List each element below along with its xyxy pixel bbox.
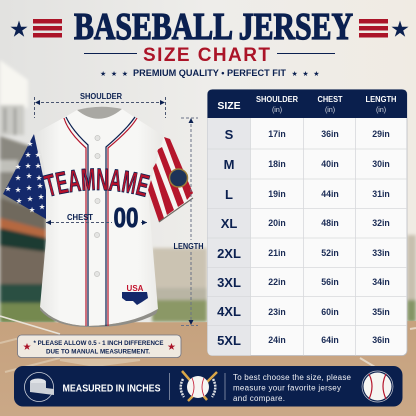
measurement values: 20in bbox=[268, 218, 286, 228]
divider bbox=[170, 373, 225, 400]
chest measurement: CHEST bbox=[67, 213, 93, 222]
icon: right stars and stripes bbox=[359, 19, 408, 38]
note callout: DUE TO MANUAL MEASUREMENT. bbox=[46, 348, 150, 356]
table header: (in) bbox=[272, 107, 282, 114]
size labels: 4XL bbox=[217, 304, 241, 319]
measurement values: 24in bbox=[268, 335, 286, 345]
bottom banner bbox=[14, 366, 402, 406]
left sleeve: stars: ★ bbox=[25, 151, 32, 159]
measurement values: 19in bbox=[268, 189, 286, 199]
left sleeve: stars: ★ bbox=[5, 185, 12, 193]
measurement values: 52in bbox=[321, 248, 339, 258]
left sleeve: stars: ★ bbox=[38, 193, 45, 201]
table header: (in) bbox=[325, 107, 335, 114]
size labels: 2XL bbox=[217, 246, 241, 261]
jersey bbox=[3, 106, 194, 328]
left sleeve: stars: ★ bbox=[35, 151, 42, 159]
size labels: 5XL bbox=[217, 333, 241, 348]
left sleeve: stars: ★ bbox=[15, 163, 22, 171]
measurement values: 18in bbox=[268, 159, 286, 169]
table header: SIZE bbox=[217, 100, 241, 112]
measurement values: 17in bbox=[268, 129, 286, 139]
measurement values: 36in bbox=[321, 129, 339, 139]
USA logo: USA bbox=[127, 284, 144, 293]
measurement values: 22in bbox=[268, 277, 286, 287]
size labels: XL bbox=[221, 216, 237, 231]
team name: TEAMNAME bbox=[42, 168, 150, 198]
measurement values: 34in bbox=[372, 277, 390, 287]
size labels: M bbox=[224, 157, 234, 172]
icon: crossed bats and ball bbox=[181, 371, 217, 401]
size labels bbox=[217, 127, 241, 348]
USA logo bbox=[122, 284, 148, 305]
collar inner bbox=[77, 107, 122, 132]
measured in inches label: MEASURED IN INCHES bbox=[62, 384, 161, 394]
tip text: measure your favorite jersey bbox=[233, 384, 341, 392]
placket piping bbox=[64, 117, 137, 326]
right sleeve: stripes bbox=[148, 136, 193, 222]
table header bbox=[208, 90, 407, 118]
left sleeve: stars: ★ bbox=[27, 195, 34, 203]
left sleeve: stars: ★ bbox=[27, 140, 34, 148]
size labels: S bbox=[225, 127, 234, 142]
subtitle: SIZE CHART bbox=[143, 45, 270, 66]
measurement values: 32in bbox=[372, 218, 390, 228]
left sleeve: stars: ★ bbox=[16, 197, 23, 205]
table header: SHOULDER bbox=[256, 95, 298, 104]
tip text: To best choose the size, please bbox=[233, 373, 352, 382]
measurement values: 64in bbox=[321, 335, 339, 345]
measurement values: 56in bbox=[321, 277, 339, 287]
measurement values: 35in bbox=[372, 307, 390, 317]
measurement values: 23in bbox=[268, 307, 286, 317]
icon: tape measure bbox=[24, 372, 54, 402]
tagline bbox=[100, 68, 320, 78]
buttons bbox=[94, 135, 100, 277]
left sleeve: stars: ★ bbox=[35, 162, 42, 170]
note callout: * PLEASE ALLOW 0.5 - 1 INCH DIFFERENCE bbox=[34, 340, 164, 347]
table header: CHEST bbox=[318, 95, 343, 104]
left sleeve: stars: ★ bbox=[15, 174, 22, 182]
size column bbox=[208, 118, 250, 356]
tagline: ★ ★ ★ bbox=[100, 70, 128, 78]
size table bbox=[208, 90, 407, 356]
tip text: and compare. bbox=[233, 394, 285, 403]
measurement values: 21in bbox=[268, 248, 286, 258]
measurement values: 36in bbox=[372, 335, 390, 345]
left sleeve: stars: ★ bbox=[29, 206, 36, 214]
table header: LENGTH bbox=[366, 95, 397, 104]
left sleeve: stars: ★ bbox=[39, 203, 46, 211]
left sleeve: stars: ★ bbox=[15, 186, 22, 194]
length measurement bbox=[174, 118, 204, 326]
note callout bbox=[18, 335, 181, 358]
icon: baseball bbox=[362, 371, 393, 402]
measurement values: 30in bbox=[372, 159, 390, 169]
size labels: L bbox=[225, 187, 233, 202]
left sleeve: stars: ★ bbox=[36, 174, 43, 182]
length measurement: LENGTH bbox=[174, 242, 204, 251]
chest measurement bbox=[46, 213, 147, 225]
measurement values: 60in bbox=[321, 307, 339, 317]
shoulder measurement bbox=[34, 92, 166, 118]
tagline: ★ ★ ★ bbox=[292, 70, 320, 78]
measurement values: 44in bbox=[321, 189, 339, 199]
left sleeve: stars: ★ bbox=[26, 184, 33, 192]
left sleeve: stars: ★ bbox=[25, 162, 32, 170]
table header: (in) bbox=[376, 107, 386, 114]
tip text bbox=[233, 373, 352, 403]
tagline: PREMIUM QUALITY • PERFECT FIT bbox=[133, 68, 286, 78]
size labels: 3XL bbox=[217, 275, 241, 290]
measurement values bbox=[268, 129, 390, 345]
left sleeve: stars: ★ bbox=[26, 172, 33, 180]
measurement values: 31in bbox=[372, 189, 390, 199]
measurement values: 48in bbox=[321, 218, 339, 228]
table body bbox=[208, 90, 407, 356]
measurement values: 33in bbox=[372, 248, 390, 258]
measurement values: 40in bbox=[321, 159, 339, 169]
left sleeve: stars bbox=[3, 134, 46, 219]
jersey body bbox=[34, 109, 164, 326]
left sleeve: stars: ★ bbox=[37, 182, 44, 190]
icon: left stars and stripes bbox=[10, 19, 62, 38]
measurement values: 29in bbox=[372, 129, 390, 139]
shoulder measurement: SHOULDER bbox=[80, 92, 122, 101]
number: 00 bbox=[114, 202, 138, 233]
